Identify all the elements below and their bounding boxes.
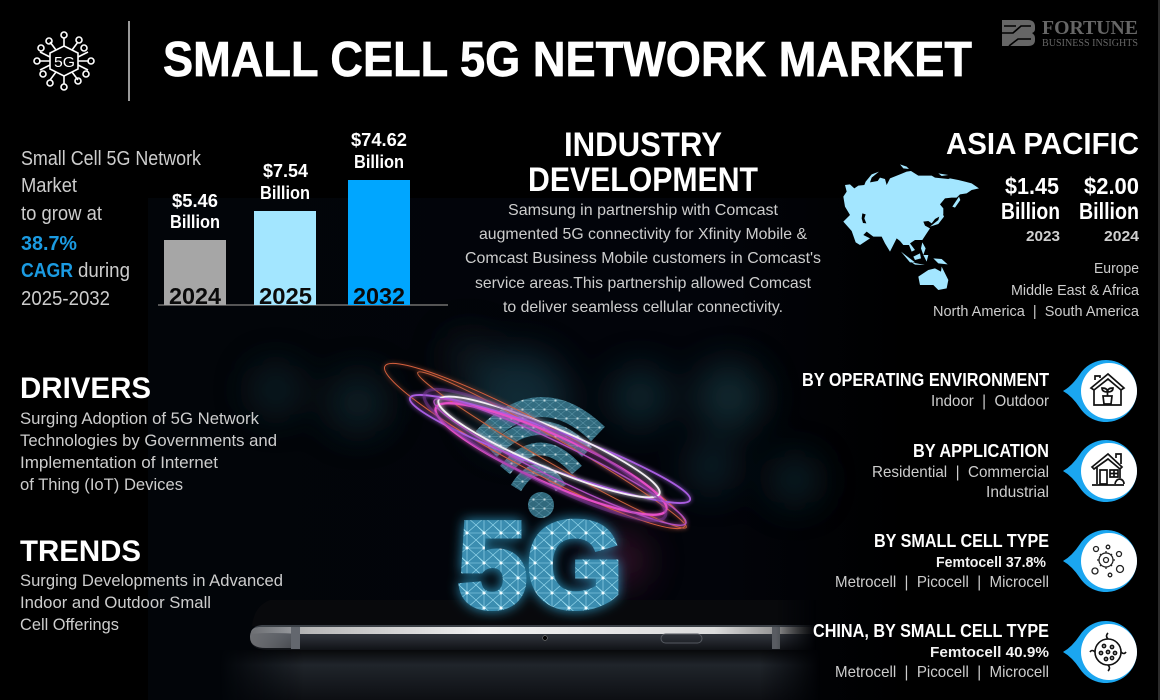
industry development [465,126,821,316]
icon: 5G circuit [34,32,94,90]
segment: by small cell type: Femtocell 37.8% [936,554,1046,571]
market growth text: Market [21,175,77,197]
other regions [933,260,1140,320]
segment: by application [872,440,1137,502]
title: SMALL CELL 5G NETWORK MARKET [163,33,972,87]
value 2024 [1079,173,1140,245]
icon: house [1063,440,1137,502]
body text: Cell Offerings [20,615,119,634]
body text: Surging Adoption of 5G Network [20,409,259,428]
value 2024: Billion [1079,198,1139,224]
segment: china, by small cell type: CHINA, BY SMALL CELL TYPE [813,621,1049,641]
segment: china, by small cell type: Metrocell | Picocell | Microcell [835,664,1049,681]
segment: by application: Residential | Commercial [872,464,1049,481]
trends [20,535,283,634]
body text: augmented 5G connectivity for Xfinity Mobile & [479,226,807,243]
bar 2025 [254,161,316,309]
segment: china, by small cell type [813,621,1137,683]
table surface [242,651,806,700]
smartphone [250,625,812,650]
bar 2024: Billion [170,212,220,232]
bar 2032 [348,130,410,309]
market growth text [21,148,202,310]
body text [465,202,821,316]
segment: by application: Industrial [986,484,1049,501]
other regions: North America | South America [933,303,1140,320]
body text [20,409,277,494]
5G hologram: 5G [458,497,623,633]
body text: Indoor and Outdoor Small [20,593,211,612]
value 2023: Billion [1001,198,1060,224]
body text: Surging Developments in Advanced [20,571,283,590]
icon: cells [1063,530,1137,592]
body text: service areas.This partnership allowed Comcast [475,275,812,292]
segment: by small cell type: Metrocell | Picocell | Microcell [835,574,1049,591]
body text: Implementation of Internet [20,453,218,472]
value 2024: 2024 [1104,228,1140,245]
segment: by operating environment: BY OPERATING ENVIRONMENT [802,370,1049,390]
icon: 5G circuit: 5G [54,54,75,71]
market growth text: 38.7% [21,233,77,255]
other regions: Middle East & Africa [1011,282,1140,299]
body text: of Thing (IoT) Devices [20,475,183,494]
asia pacific [843,126,1140,320]
other regions: Europe [1094,260,1139,277]
segment: china, by small cell type: Femtocell 40.9% [930,644,1049,661]
bar 2024 [164,191,226,309]
bar 2024: 2024 [169,283,221,309]
heading: TRENDS [20,535,141,568]
bar 2032: $74.62 [351,130,407,150]
icon: house with plant [1063,360,1137,422]
value 2023: $1.45 [1005,173,1059,199]
bar chart [158,130,448,309]
bar 2025: $7.54 [263,161,308,181]
market growth text: to grow at [21,203,102,225]
bar 2025: 2025 [259,283,312,309]
map: Asia Pacific [843,164,979,290]
market growth text: CAGR [21,260,73,282]
hero image: 5G over smartphone [242,336,825,700]
bar 2025: Billion [260,183,310,203]
segment: by small cell type [835,530,1137,592]
heading: ASIA PACIFIC [946,126,1139,161]
segment: by small cell type: BY SMALL CELL TYPE [874,531,1049,551]
bar 2032: Billion [354,152,404,172]
value 2024: $2.00 [1084,173,1139,199]
drivers [20,372,277,494]
market growth text: 2025-2032 [21,288,110,310]
market growth text: during [78,260,130,282]
value 2023: 2023 [1026,228,1060,245]
segment: by operating environment: Indoor | Outdoor [931,393,1050,410]
heading [528,126,758,199]
heading: DEVELOPMENT [528,161,758,199]
light rings [374,345,697,547]
body text: to deliver seamless cellular connectivity. [503,299,783,316]
value 2023 [1001,173,1060,245]
segment: by operating environment [802,360,1137,422]
icon: cell [1063,621,1137,683]
bar 2024: $5.46 [172,191,218,211]
logo: Fortune Business Insights: FORTUNE [1042,18,1138,39]
logo: Fortune Business Insights: BUSINESS INSIGHTS [1042,38,1138,49]
wifi symbol [483,407,598,518]
bar 2032: 2032 [353,283,405,309]
body text: Samsung in partnership with Comcast [508,202,779,219]
body text: Technologies by Governments and [20,431,277,450]
heading: DRIVERS [20,372,151,405]
body text: Comcast Business Mobile customers in Comcast's [465,250,821,267]
bokeh lights [250,335,819,588]
market growth text: Small Cell 5G Network [21,148,202,170]
body text [20,571,283,634]
logo: Fortune Business Insights [1002,18,1138,49]
segment: by application: BY APPLICATION [913,441,1049,461]
heading: INDUSTRY [564,126,722,164]
